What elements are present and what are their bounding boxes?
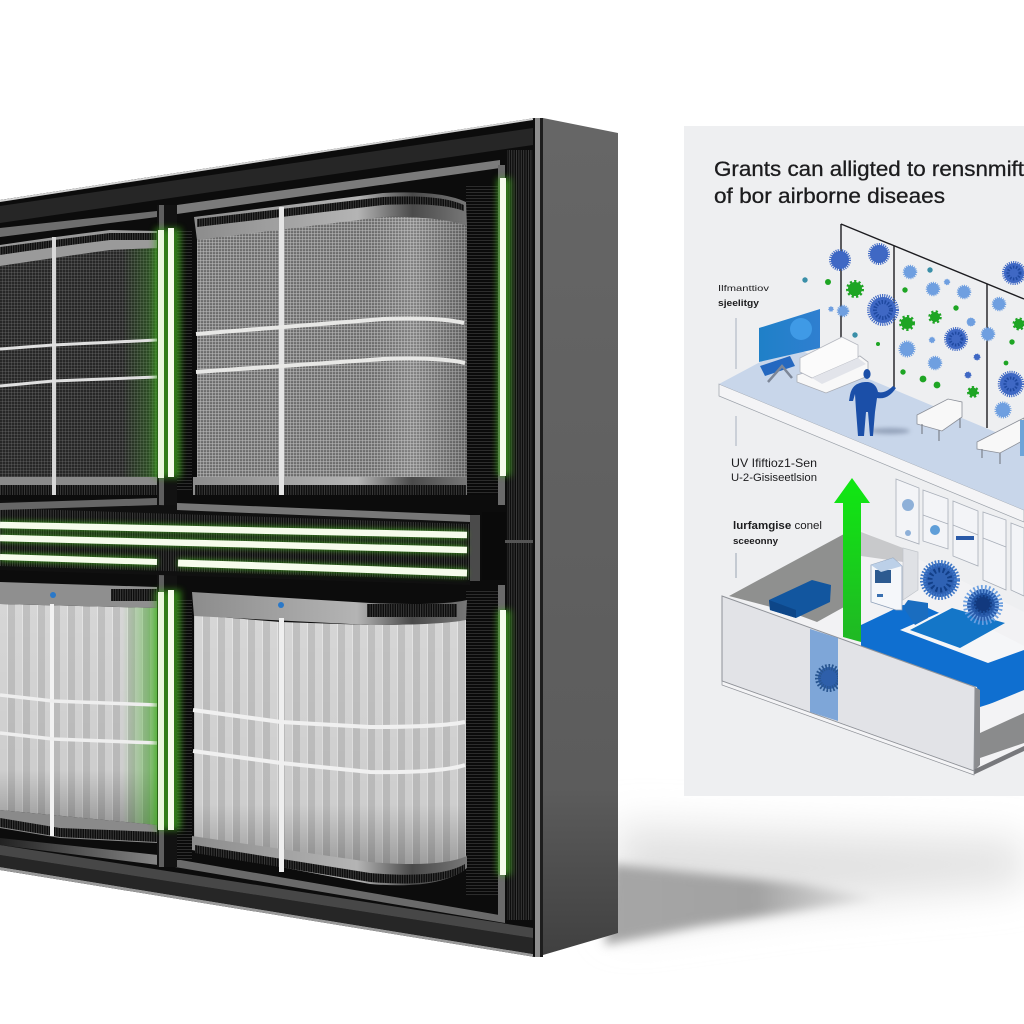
title: Grants can alligted to rensnmift xyxy=(714,158,1024,181)
illustration: lower room xyxy=(722,479,1024,775)
filter: top right xyxy=(193,192,467,495)
icon: armchair left xyxy=(917,399,962,441)
horizontal louvre section xyxy=(0,498,533,585)
virus particles xyxy=(802,245,1024,417)
label: UV section xyxy=(731,456,817,484)
label: top annotation: sjeelitgy xyxy=(718,298,759,308)
illustration: upper floor xyxy=(719,224,1024,522)
leader line: lower room xyxy=(735,553,737,578)
panel: airborne disease infographic xyxy=(684,126,1024,796)
front wall base xyxy=(722,681,974,775)
person shadow xyxy=(870,428,910,434)
floor slab xyxy=(719,384,1024,522)
green glow tubes xyxy=(0,178,511,875)
label: top annotation xyxy=(718,283,770,308)
icon: virus right xyxy=(967,589,999,621)
icon: wall screen xyxy=(759,309,820,382)
filter: bottom left xyxy=(0,582,157,843)
room divider post xyxy=(903,548,918,600)
icon: armchair right xyxy=(977,418,1024,464)
wall lines xyxy=(841,224,1024,428)
filter: bottom right xyxy=(192,592,467,885)
unit front frame xyxy=(0,100,536,970)
icon: person xyxy=(849,369,896,436)
front wall xyxy=(722,596,975,771)
unit front corner edge xyxy=(532,118,540,957)
unit side face xyxy=(543,118,618,955)
label: UV section: UV Ififtioz1-Sen xyxy=(731,456,817,470)
blue floor xyxy=(861,605,1024,707)
green up arrow xyxy=(834,478,870,642)
bottom rails xyxy=(0,838,158,865)
label: lower room: lurfamgise conel xyxy=(733,520,822,532)
filter: top left xyxy=(0,230,157,495)
wall art details xyxy=(902,499,974,540)
label: UV section: U-2-Gisiseetlsion xyxy=(731,472,817,484)
floor shadow xyxy=(605,825,1024,945)
right cooling fins xyxy=(507,150,533,920)
inner light rail top xyxy=(177,160,500,214)
air filtration unit xyxy=(0,100,618,970)
blue wall panel xyxy=(810,629,838,721)
icon: virus left xyxy=(923,563,957,597)
icon: virus in wall panel xyxy=(818,667,840,689)
leader lines: top annotation xyxy=(735,318,737,446)
right end wall xyxy=(973,687,1024,775)
icon: bed xyxy=(769,580,831,618)
icon: air purifier machine xyxy=(871,558,902,610)
bay dividers xyxy=(157,854,177,867)
label: lower room: sceeonny xyxy=(733,536,778,546)
room interior xyxy=(729,530,1024,720)
inner side fins xyxy=(466,185,498,495)
subtitle line: of bor airborne diseaes xyxy=(714,185,945,208)
icon: sofa xyxy=(797,337,868,393)
label: lower room xyxy=(733,520,822,546)
label: top annotation: Ilfmanttiov xyxy=(718,283,770,293)
wall art frames xyxy=(896,479,1024,596)
